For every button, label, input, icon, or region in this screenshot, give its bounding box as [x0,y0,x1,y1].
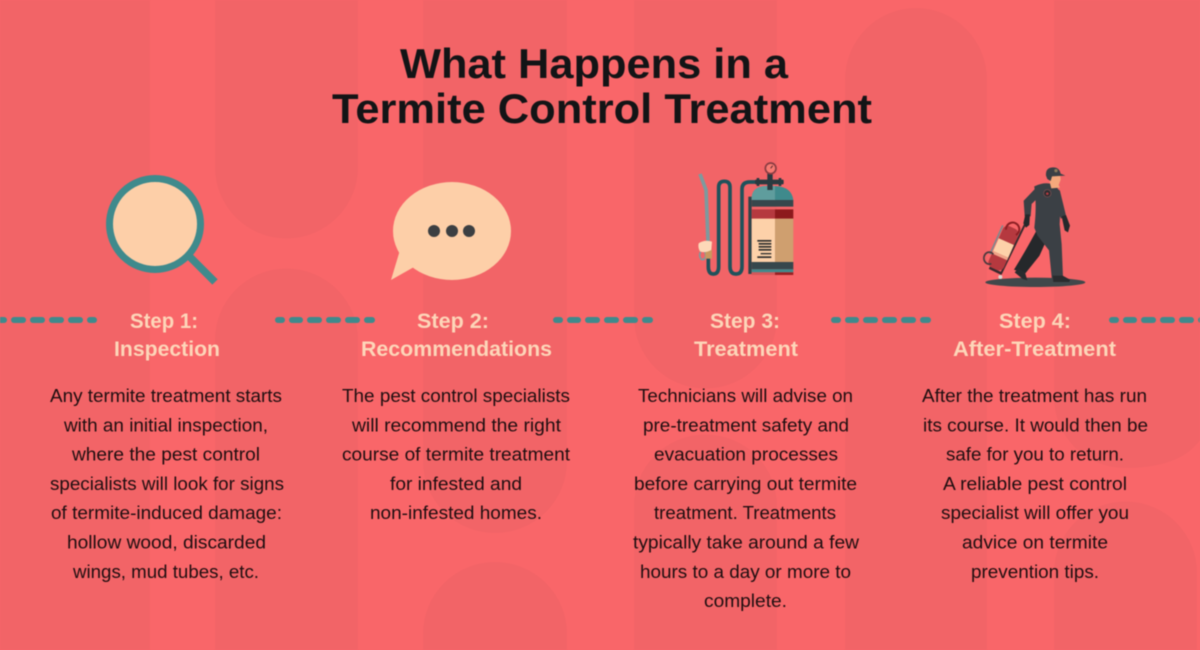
torso and front leg [1035,184,1062,277]
step 4 heading [953,310,1116,361]
dashed timeline [0,317,1200,323]
step 2 text: The pest control specialists [342,386,570,406]
step 1 text: hollow wood, discarded [67,532,266,552]
step 2 text: for infested and [390,474,522,494]
head [1049,173,1061,188]
arms [1024,186,1042,216]
step 1 text: wings, mud tubes, etc. [72,562,259,582]
step 4 text: advice on termite [962,532,1108,552]
title [332,40,872,132]
step 2 text: non-infested homes. [370,503,542,523]
step 3 text: evacuation processes [654,445,838,465]
step 3 heading: Step 3: [710,310,780,333]
step 4 heading: After-Treatment [953,338,1116,361]
step 1 heading: Step 1: [130,310,198,333]
step 1 heading: Inspection [114,338,220,361]
step 4 text: safe for you to return. [946,445,1124,465]
icon: speech bubble [391,182,511,280]
back leg [1016,230,1047,272]
step 3 text [633,386,860,611]
step 3 text: typically take around a few [633,532,860,552]
step 1 heading [114,310,220,361]
step 4 text: specialist will offer you [941,503,1129,523]
step 4 text: prevention tips. [971,562,1099,582]
icon: magnifying glass [110,178,215,282]
step 1 text [50,386,284,582]
step 2 heading: Recommendations [361,338,552,361]
step 3 text: hours to a day or more to [640,562,851,582]
step 1 text: with an initial inspection, [63,415,268,435]
step 3 text: complete. [704,591,787,611]
step 3 text: pre-treatment safety and [643,415,849,435]
trolley [984,223,1025,279]
step 2 text: will recommend the right [351,415,561,435]
step 3 text: before carrying out termite [634,474,857,494]
step 4 text: After the treatment has run [922,386,1147,406]
step 4 text: A reliable pest control [943,474,1127,494]
step 1 text: of termite-induced damage: [51,503,282,523]
step 3 text: Technicians will advise on [638,386,853,406]
step 2 text [342,386,570,523]
title: What Happens in a [400,40,789,87]
step 4 text [922,386,1148,582]
step 1 text: where the pest control [71,445,260,465]
step 4 heading: Step 4: [999,310,1071,333]
step 2 text: course of termite treatment [342,445,570,465]
step 3 text: treatment. Treatments [654,503,836,523]
step 1 text: Any termite treatment starts [50,386,282,406]
title: Termite Control Treatment [332,85,872,132]
icon: technician with extinguisher trolley [984,167,1085,287]
step 1 text: specialists will look for signs [50,474,284,494]
step 3 heading [694,310,798,361]
step 4 text: its course. It would then be [923,415,1148,435]
step 2 heading: Step 2: [417,310,489,333]
step 3 heading: Treatment [694,338,798,361]
step 2 heading [361,310,552,361]
icon: pesticide tank [698,163,793,275]
